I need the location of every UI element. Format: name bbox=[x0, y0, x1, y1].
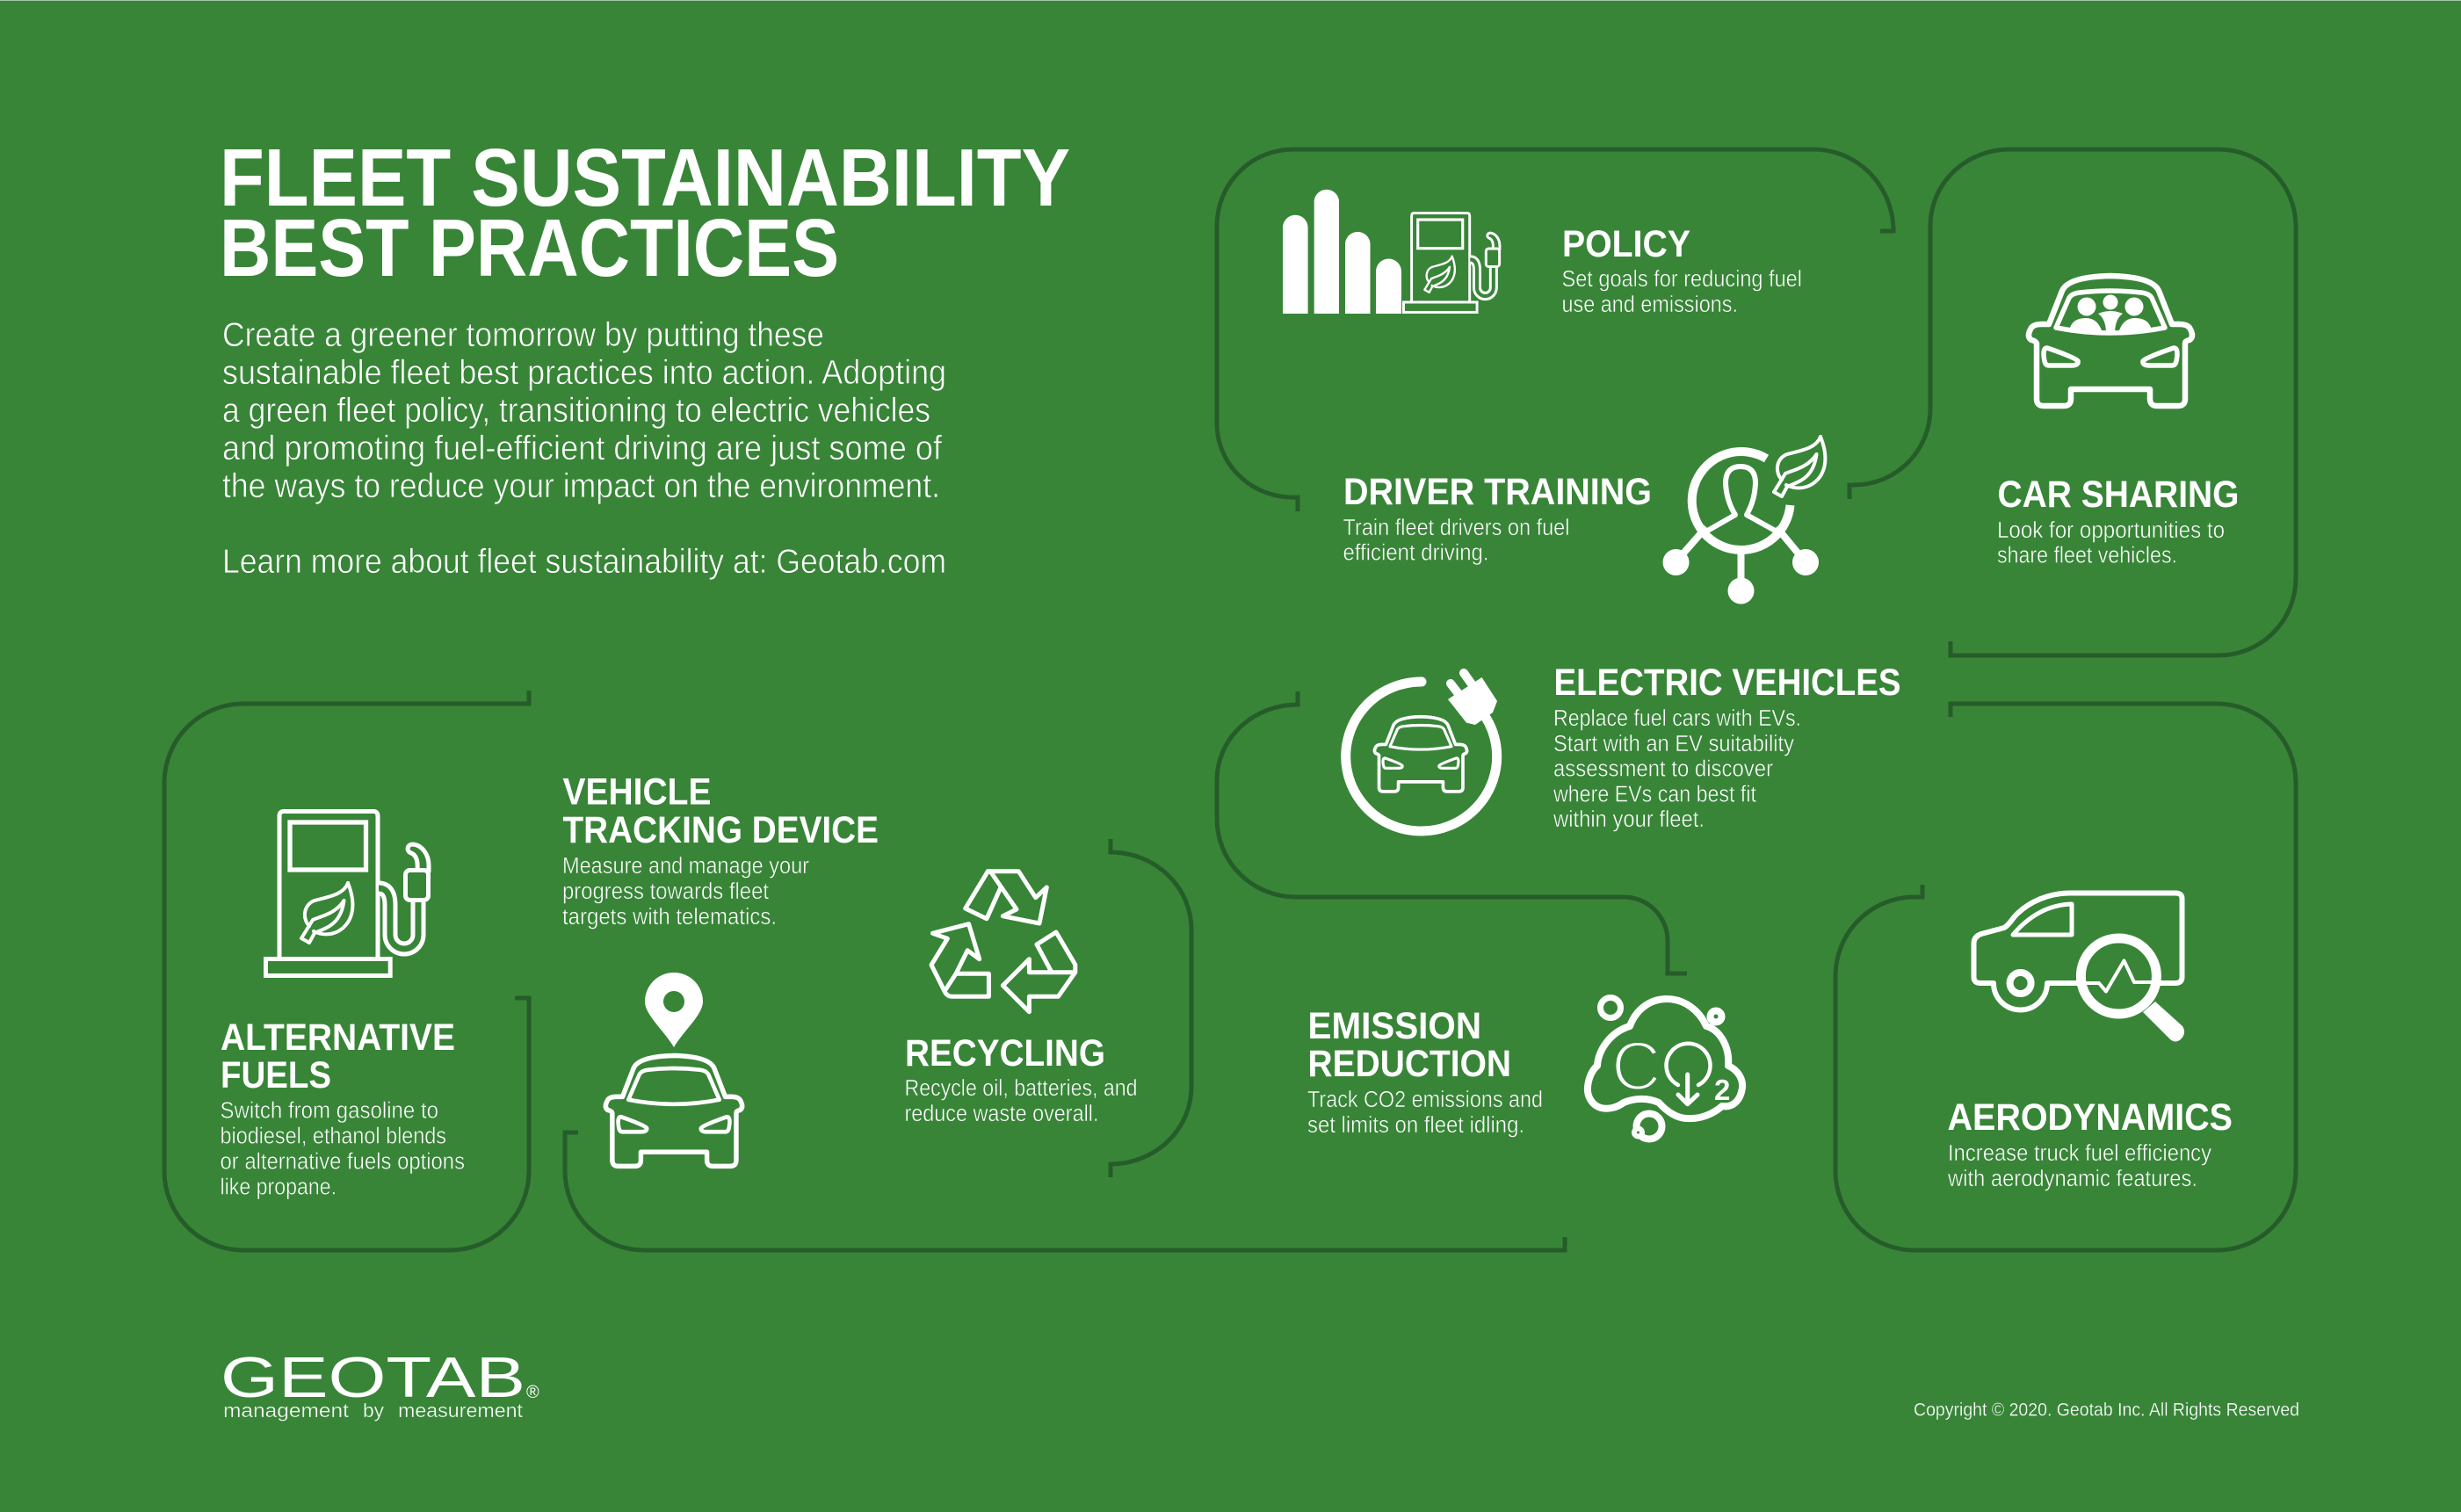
text: driver training description bbox=[1343, 516, 1569, 566]
heading: emission reduction bbox=[1307, 1005, 1511, 1085]
icon: car bbox=[605, 1056, 742, 1166]
connector: aerodynamics bbox=[1835, 704, 2296, 1250]
text: emission reduction description: Track CO2 emissions and bbox=[1307, 1088, 1543, 1112]
text: electric vehicles description: Replace fuel cars with EVs. bbox=[1553, 706, 1801, 731]
panel: policy bbox=[1283, 190, 1802, 317]
heading: electric vehicles: ELECTRIC VEHICLES bbox=[1553, 662, 1901, 704]
heading: car sharing: CAR SHARING bbox=[1998, 474, 2239, 516]
panel: alternative fuels bbox=[220, 812, 465, 1200]
heading: alternative fuels: FUELS bbox=[221, 1054, 331, 1096]
connector: car sharing bbox=[1849, 149, 2296, 655]
connector: electric vehicles bbox=[1217, 691, 1687, 973]
copyright: Copyright © 2020. Geotab Inc. All Rights Reserved bbox=[1914, 1400, 2299, 1420]
icon: driver with network and leaf bbox=[1662, 437, 1825, 604]
heading: emission reduction: EMISSION bbox=[1307, 1005, 1481, 1047]
text: electric vehicles description: Start with an EV suitability bbox=[1553, 732, 1794, 756]
text: electric vehicles description: assessment to discover bbox=[1553, 757, 1773, 782]
intro text block: Create a greener tomorrow by putting these bbox=[222, 316, 824, 354]
text: driver training description: efficient driving. bbox=[1343, 541, 1488, 566]
text: recycling description bbox=[905, 1076, 1137, 1126]
heading: recycling: RECYCLING bbox=[905, 1032, 1105, 1074]
connector: recycling bbox=[1111, 839, 1191, 1177]
icon: CO2 cloud bbox=[1588, 998, 1742, 1139]
text: car sharing description: share fleet vehicles. bbox=[1997, 543, 2177, 568]
panel: car sharing bbox=[1997, 276, 2239, 568]
title: BEST PRACTICES bbox=[220, 202, 839, 293]
intro text block: Learn more about fleet sustainability at: Geotab.com bbox=[222, 543, 946, 581]
text: alternative fuels description: like propane. bbox=[220, 1176, 337, 1200]
logo: Geotab: GEOTAB bbox=[221, 1345, 525, 1409]
icon: car with three passengers bbox=[2029, 276, 2192, 406]
text: emission reduction description: set limits on fleet idling. bbox=[1307, 1113, 1524, 1138]
title bbox=[220, 132, 1070, 293]
icon: recycling arrows bbox=[931, 872, 1075, 1012]
logo: Geotab: management bbox=[223, 1400, 349, 1422]
intro text block: a green fleet policy, transitioning to electric vehicles bbox=[222, 392, 930, 430]
icon: van with magnifier bbox=[1973, 893, 2184, 1042]
panel: aerodynamics bbox=[1947, 893, 2233, 1191]
panel: electric vehicles bbox=[1346, 662, 1901, 832]
text: car sharing description: Look for opportunities to bbox=[1997, 518, 2225, 543]
text: aerodynamics description: Increase truck fuel efficiency bbox=[1948, 1141, 2211, 1166]
icon: location pin bbox=[645, 973, 703, 1047]
icon: electric car with plug bbox=[1346, 673, 1497, 831]
intro text block: sustainable fleet best practices into action. Adopting bbox=[222, 354, 946, 392]
panel: emission reduction bbox=[1307, 998, 1742, 1139]
text: alternative fuels description bbox=[220, 1098, 465, 1200]
heading: policy: POLICY bbox=[1562, 223, 1690, 265]
connector: vehicle tracking bbox=[565, 1132, 1565, 1250]
icon: CO2 cloud: C bbox=[1611, 1027, 1661, 1104]
heading: driver training: DRIVER TRAINING bbox=[1343, 471, 1652, 513]
heading: vehicle tracking device: TRACKING DEVICE bbox=[562, 809, 879, 851]
logo: Geotab: measurement bbox=[398, 1400, 523, 1422]
icon: fuel pump with leaf bbox=[265, 812, 429, 975]
intro text block bbox=[222, 316, 946, 581]
heading: emission reduction: REDUCTION bbox=[1307, 1043, 1511, 1085]
panel: recycling bbox=[905, 872, 1137, 1126]
text: alternative fuels description: Switch from gasoline to bbox=[220, 1098, 438, 1123]
intro text block: and promoting fuel-efficient driving are just some of bbox=[222, 430, 942, 467]
text: recycling description: Recycle oil, batteries, and bbox=[905, 1076, 1137, 1101]
logo: Geotab: by bbox=[363, 1400, 384, 1422]
text: emission reduction description bbox=[1307, 1088, 1543, 1138]
icon: policy bars and fuel pump bbox=[1283, 190, 1500, 314]
logo: Geotab: ® bbox=[526, 1383, 539, 1402]
text: vehicle tracking description: progress towards fleet bbox=[562, 879, 769, 904]
logo: Geotab bbox=[221, 1345, 539, 1422]
text: vehicle tracking description: targets with telematics. bbox=[562, 905, 777, 930]
text: policy description: Set goals for reducing fuel bbox=[1562, 267, 1802, 292]
title: FLEET SUSTAINABILITY bbox=[220, 132, 1070, 223]
intro text block: the ways to reduce your impact on the environment. bbox=[222, 467, 940, 505]
text: vehicle tracking description bbox=[562, 854, 809, 930]
text: alternative fuels description: or alternative fuels options bbox=[220, 1149, 465, 1174]
text: recycling description: reduce waste overall. bbox=[905, 1102, 1098, 1126]
text: vehicle tracking description: Measure and manage your bbox=[562, 854, 809, 879]
text: alternative fuels description: biodiesel, ethanol blends bbox=[220, 1125, 446, 1149]
icon: CO2 cloud: 2 bbox=[1714, 1074, 1730, 1106]
text: electric vehicles description: where EVs can best fit bbox=[1553, 782, 1756, 807]
heading: aerodynamics: AERODYNAMICS bbox=[1947, 1096, 2233, 1139]
text: driver training description: Train fleet drivers on fuel bbox=[1343, 516, 1569, 540]
heading: vehicle tracking device bbox=[562, 771, 879, 851]
text: aerodynamics description: with aerodynamic features. bbox=[1947, 1167, 2197, 1191]
text: electric vehicles description: within your fleet. bbox=[1553, 807, 1705, 832]
heading: alternative fuels bbox=[221, 1016, 455, 1096]
heading: vehicle tracking device: VEHICLE bbox=[562, 771, 712, 814]
text: policy description: use and emissions. bbox=[1562, 293, 1738, 317]
text: aerodynamics description bbox=[1947, 1141, 2211, 1191]
connector: policy and driver training bbox=[1217, 149, 1893, 511]
text: electric vehicles description bbox=[1553, 706, 1801, 832]
panel: driver training bbox=[1343, 437, 1825, 604]
panel: vehicle tracking device bbox=[562, 771, 879, 1166]
text: car sharing description bbox=[1997, 518, 2225, 568]
connector: alternative fuels bbox=[164, 691, 529, 1250]
heading: alternative fuels: ALTERNATIVE bbox=[221, 1016, 455, 1059]
text: policy description bbox=[1562, 267, 1802, 317]
